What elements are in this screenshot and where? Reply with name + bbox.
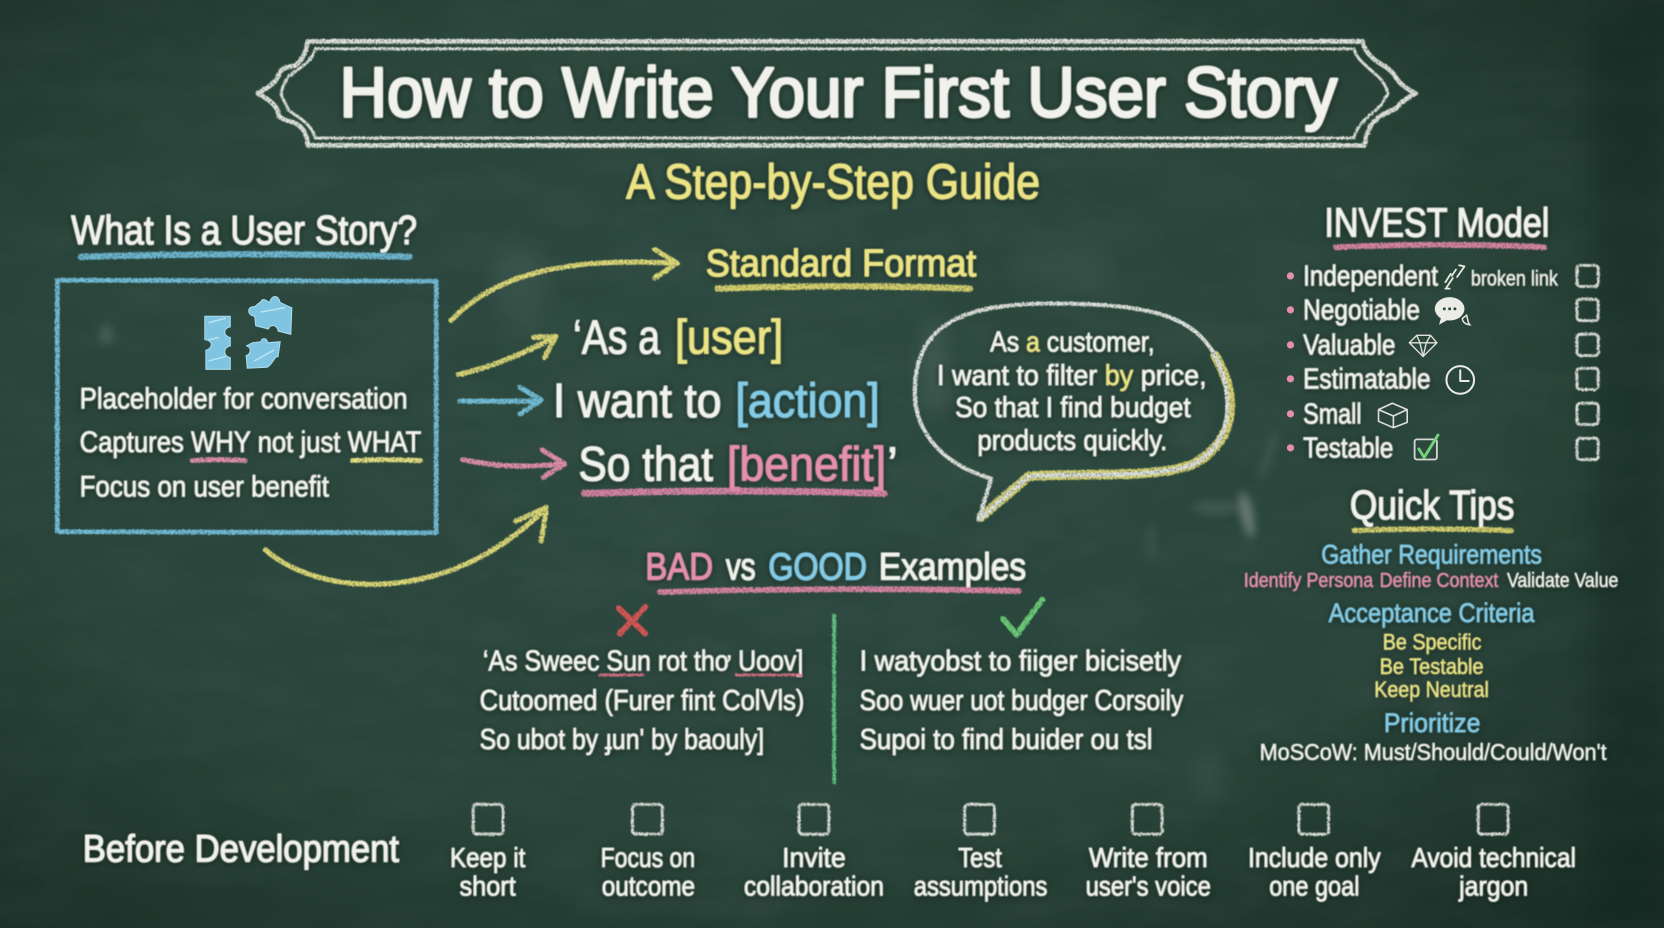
heading: bad vs good: vs — [726, 545, 756, 588]
heading: invest model: INVEST Model — [1324, 200, 1549, 246]
check item: write from users voice: Write from — [1089, 842, 1208, 873]
item: testable: Testable — [1303, 432, 1393, 464]
check item: invite collaboration: Invite — [782, 842, 846, 873]
bubble text: So that I find budget — [955, 392, 1191, 424]
format line: i want to action — [553, 375, 880, 428]
panel: quick tips — [1244, 482, 1618, 765]
icon: chat bubble — [1435, 297, 1470, 325]
check item: focus on outcome: Focus on — [601, 842, 695, 873]
box text: focus: Focus on user benefit — [80, 471, 330, 504]
arrow: to i want to — [460, 387, 541, 414]
item: independent: Independent — [1303, 260, 1438, 292]
box text: placeholder: Placeholder for conversation — [80, 383, 408, 416]
check item: focus on outcome — [601, 842, 695, 902]
good example text: Soo wuer uot budger Corsoily — [860, 685, 1184, 717]
heading underline — [660, 589, 1019, 592]
check item: test assumptions: Test — [958, 842, 1002, 873]
icon: broken link — [1445, 265, 1464, 289]
check item: keep it short: Keep it — [450, 842, 526, 873]
arrow: to as a user — [458, 336, 556, 375]
tip items: acceptance — [1374, 629, 1489, 702]
check item: invite collaboration: collaboration — [744, 871, 884, 902]
check item: keep it short — [450, 842, 526, 902]
box text: why not what: Captures WHY not just WHAT — [80, 426, 421, 459]
tip items: gather: Identify Persona — [1244, 570, 1374, 592]
format line: as a user: ‘As a — [573, 311, 660, 364]
check item: write from users voice — [1086, 842, 1211, 902]
title text: How to Write Your First User Story — [340, 54, 1337, 132]
check item: avoid technical jargon — [1411, 842, 1576, 902]
tip items: gather: Validate Value — [1507, 570, 1618, 592]
check item: test assumptions — [914, 842, 1047, 902]
item: independent — [1303, 260, 1558, 292]
heading: what is a user story: What Is a User Story? — [71, 207, 417, 253]
bubble text — [937, 326, 1207, 457]
icon: clock — [1446, 366, 1474, 394]
tip items: acceptance: Be Specific — [1383, 629, 1481, 654]
format line: i want to action: [action] — [735, 375, 880, 428]
divider — [832, 616, 836, 782]
check item: include only one goal: one goal — [1269, 871, 1359, 902]
check item: invite collaboration — [744, 842, 884, 902]
bad example underlines — [600, 674, 801, 676]
check item: test assumptions: assumptions — [914, 871, 1047, 902]
checkboxes — [473, 804, 1508, 834]
icon: diamond — [1409, 335, 1437, 357]
check item: avoid technical jargon: jargon — [1458, 871, 1528, 902]
subtitle: A Step-by-Step Guide — [626, 155, 1040, 209]
speech bubble example — [915, 304, 1230, 520]
item: valuable: Valuable — [1303, 329, 1396, 361]
good example text — [860, 646, 1184, 756]
bubble text: I want to filter by price, — [937, 360, 1207, 392]
bubble text: As a customer, — [990, 326, 1155, 358]
title banner — [258, 41, 1416, 145]
check item: focus on outcome: outcome — [602, 871, 695, 902]
arrow: to standard format — [451, 249, 677, 320]
bad example text: Cutoomed (Furer fint ColVls) — [480, 685, 804, 717]
definition box — [57, 280, 436, 533]
check item: keep it short: short — [460, 871, 516, 902]
arrow: to so that — [463, 450, 565, 478]
item: negotiable: Negotiable — [1303, 294, 1420, 326]
invest checkboxes — [1577, 265, 1598, 460]
underline: what — [352, 457, 420, 463]
icon: red x — [619, 607, 645, 634]
panel: before development checklist — [83, 804, 1576, 902]
bubble outline — [915, 304, 1230, 520]
heading: quick tips: Quick Tips — [1350, 482, 1514, 528]
good example text: Supoi to find buider ou tsl — [860, 724, 1152, 756]
check item: include only one goal — [1248, 842, 1381, 902]
heading: before development: Before Development — [83, 828, 399, 871]
heading underline — [1354, 529, 1511, 531]
good example text: I watyobst to fiiger bicisetly — [860, 646, 1182, 678]
panel: bad vs good examples — [480, 545, 1184, 782]
format line: so that benefit: So that — [578, 439, 713, 492]
heading: bad vs good — [645, 545, 1026, 588]
check item: write from users voice: user's voice — [1086, 871, 1211, 902]
icon: puzzle pieces — [205, 296, 292, 369]
item: estimatable: Estimatable — [1303, 363, 1431, 395]
tip items: gather — [1244, 570, 1618, 592]
bad example text: ‘As Sweec Sun rot thơ Uoov] — [483, 646, 803, 678]
heading: bad vs good: Examples — [879, 545, 1026, 588]
heading underline — [1336, 245, 1544, 247]
format line: so that benefit — [578, 439, 898, 492]
format underline — [585, 491, 884, 493]
format line: as a user — [573, 311, 783, 364]
tip heading: prioritize: Prioritize — [1384, 708, 1480, 738]
heading underline — [717, 286, 970, 289]
tip item: moscow: MoSCoW: Must/Should/Could/Won't — [1260, 739, 1607, 765]
panel: invest model — [1287, 200, 1598, 464]
heading: standard format: Standard Format — [706, 242, 977, 285]
underline: why — [192, 457, 245, 463]
format line: i want to action: I want to — [553, 375, 722, 428]
bad example text: So ubot by ɟun' by baouly] — [480, 724, 764, 756]
item: small: Small — [1303, 398, 1362, 430]
icon: green check — [1003, 600, 1042, 635]
format line: so that benefit: [benefit] — [727, 439, 886, 492]
bubble text: products quickly. — [977, 425, 1167, 457]
item: independent: broken link — [1471, 267, 1558, 290]
panel: standard format — [553, 242, 977, 493]
tip heading: gather requirements: Gather Requirements — [1321, 540, 1542, 570]
arrow: box to format — [265, 507, 547, 584]
check item: avoid technical jargon: Avoid technical — [1411, 842, 1576, 873]
icon: cube — [1379, 403, 1407, 428]
panel: what is a user story — [57, 207, 436, 533]
format line: so that benefit: ’ — [887, 439, 898, 492]
icon: checked box — [1415, 435, 1438, 460]
heading underline — [81, 254, 410, 257]
tip heading: acceptance criteria: Acceptance Criteria — [1329, 598, 1535, 628]
check item: include only one goal: Include only — [1248, 842, 1381, 873]
bullets — [1287, 272, 1294, 451]
tip items: acceptance: Be Testable — [1380, 654, 1484, 679]
tip items: acceptance: Keep Neutral — [1374, 677, 1489, 702]
format line: as a user: [user] — [675, 311, 783, 364]
bad example text — [480, 646, 804, 756]
banner frame — [258, 41, 1416, 145]
heading: bad vs good: BAD — [645, 545, 713, 588]
heading: bad vs good: GOOD — [768, 545, 867, 588]
tip items: gather: Define Context — [1380, 570, 1499, 592]
